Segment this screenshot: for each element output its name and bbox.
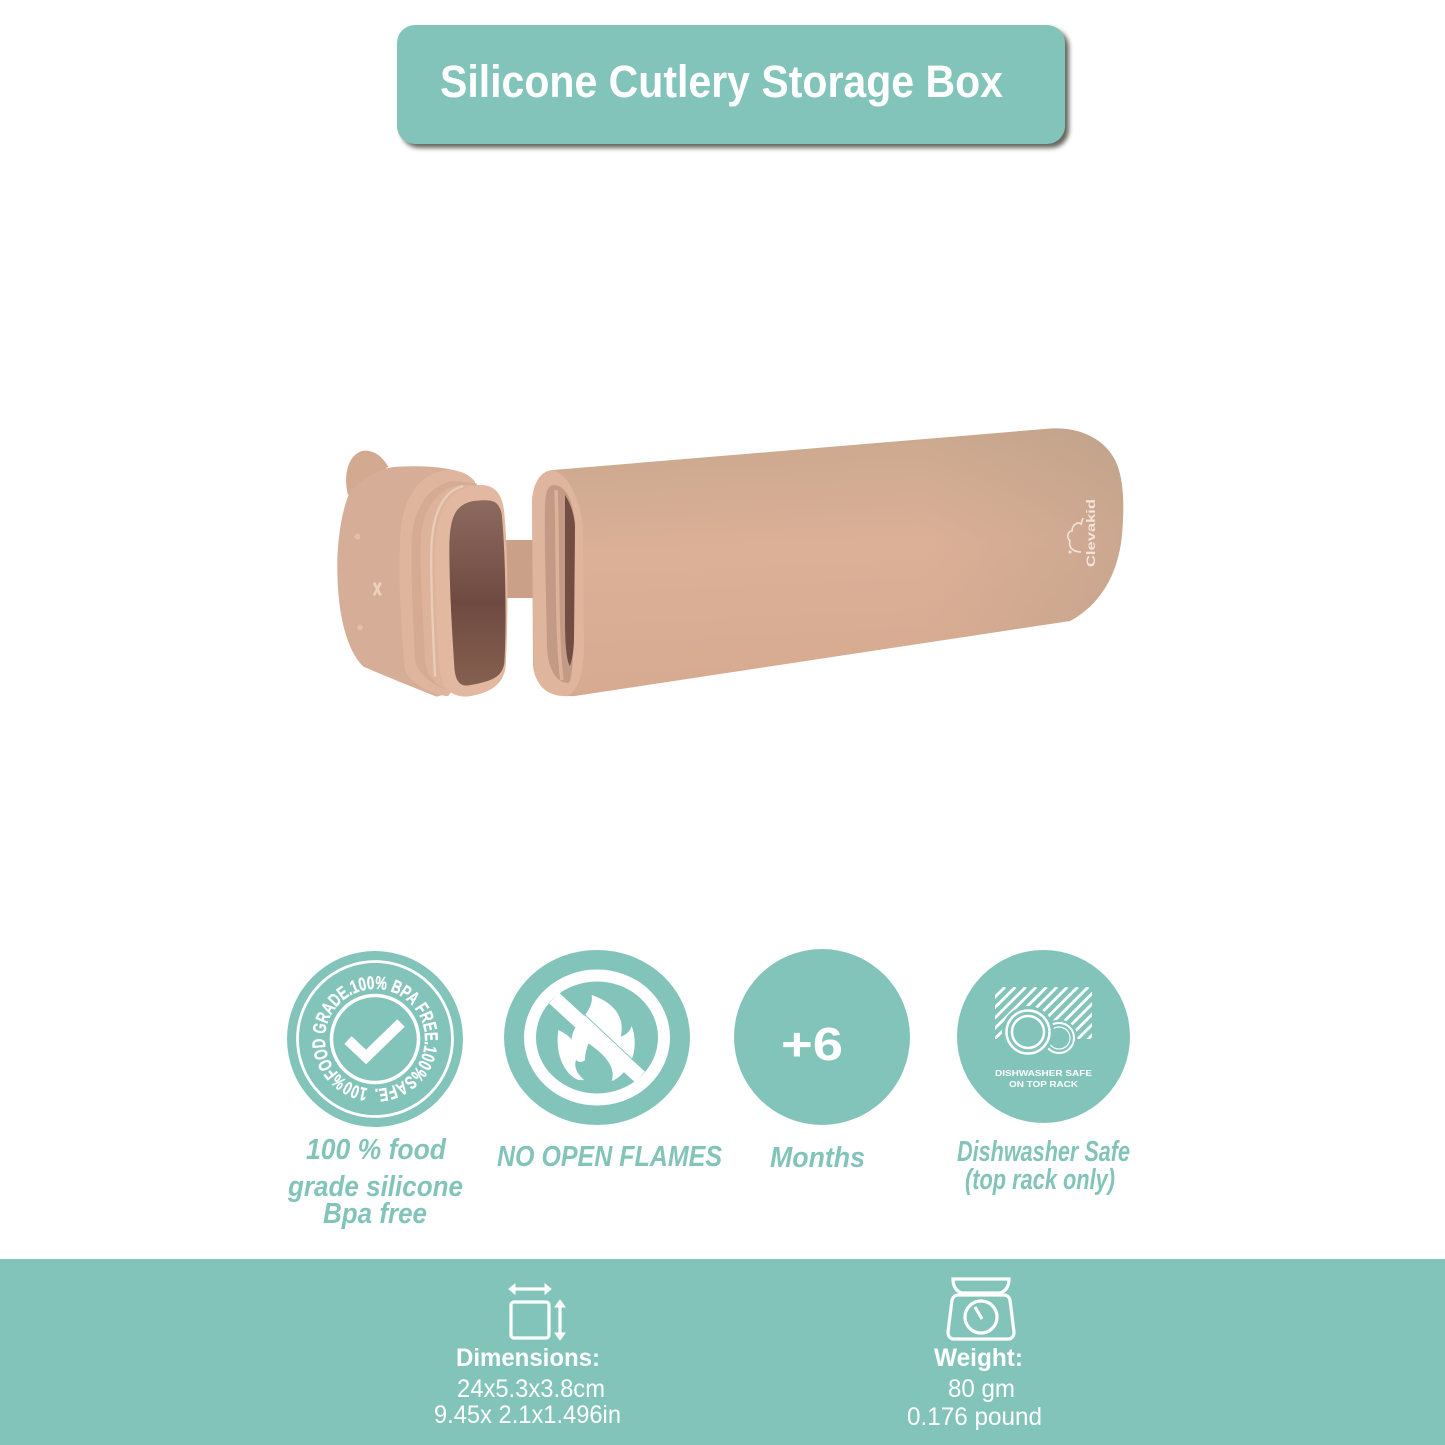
title: Silicone Cutlery Storage Box: [440, 56, 1003, 107]
flame: [558, 995, 635, 1081]
footer band: [0, 1259, 1445, 1445]
dimensions text: 9.45x 2.1x1.496in: [434, 1401, 621, 1429]
brand logo: Clevakid: Clevakid: [1086, 499, 1098, 567]
dimensions text: [434, 1344, 621, 1429]
weight text: Weight:: [934, 1344, 1023, 1372]
badge ring text: 100%FOOD GRADE.100% BPA FREE.100%SAFE.: [312, 976, 438, 1102]
weight text: 0.176 pound: [907, 1403, 1042, 1431]
bear nose mark: [374, 583, 381, 595]
icon: dishwasher safe: DISHWASHER SAFE: [995, 1068, 1092, 1078]
connecting strap: [505, 540, 535, 598]
weight text: [907, 1344, 1042, 1431]
lid with bear face: [337, 451, 507, 697]
caption: food grade: grade silicone: [287, 1171, 463, 1203]
caption: food grade: Bpa free: [323, 1198, 427, 1230]
caption: dishwasher safe: Dishwasher Safe: [957, 1136, 1130, 1168]
icon: no open flames: [504, 950, 690, 1125]
brand logo: Clevakid: [1068, 499, 1098, 567]
check mark: [348, 1023, 401, 1057]
caption: dishwasher safe: (top rack only): [965, 1164, 1115, 1196]
caption: months: Months: [770, 1142, 865, 1174]
caption: no open flames: NO OPEN FLAMES: [497, 1141, 723, 1173]
lid front rim: [435, 485, 507, 697]
icon: age +6: [734, 949, 910, 1125]
icon: age +6: +6: [781, 1018, 843, 1070]
icon: dishwasher safe: ON TOP RACK: [1009, 1079, 1079, 1089]
dimensions text: 24x5.3x3.8cm: [457, 1375, 605, 1403]
icon: weight scale: [948, 1279, 1014, 1339]
weight text: 80 gm: [948, 1375, 1015, 1403]
caption: dishwasher safe: [957, 1136, 1130, 1196]
body opening rim: [532, 470, 584, 696]
icon: food grade badge: [287, 951, 463, 1127]
box body: [532, 428, 1123, 696]
lid opening: [449, 500, 506, 686]
caption: food grade: 100 % food: [306, 1134, 447, 1166]
dimensions text: Dimensions:: [456, 1344, 600, 1372]
title banner: [397, 25, 1069, 148]
plates: [1040, 1020, 1078, 1056]
icon: dishwasher safe: [950, 950, 1140, 1123]
icon: dimensions: [509, 1284, 565, 1340]
prohibition bar: [554, 998, 640, 1077]
caption: food grade: [287, 1134, 463, 1230]
product photo: silicone cutlery box: [337, 428, 1123, 697]
body opening: [545, 485, 575, 683]
